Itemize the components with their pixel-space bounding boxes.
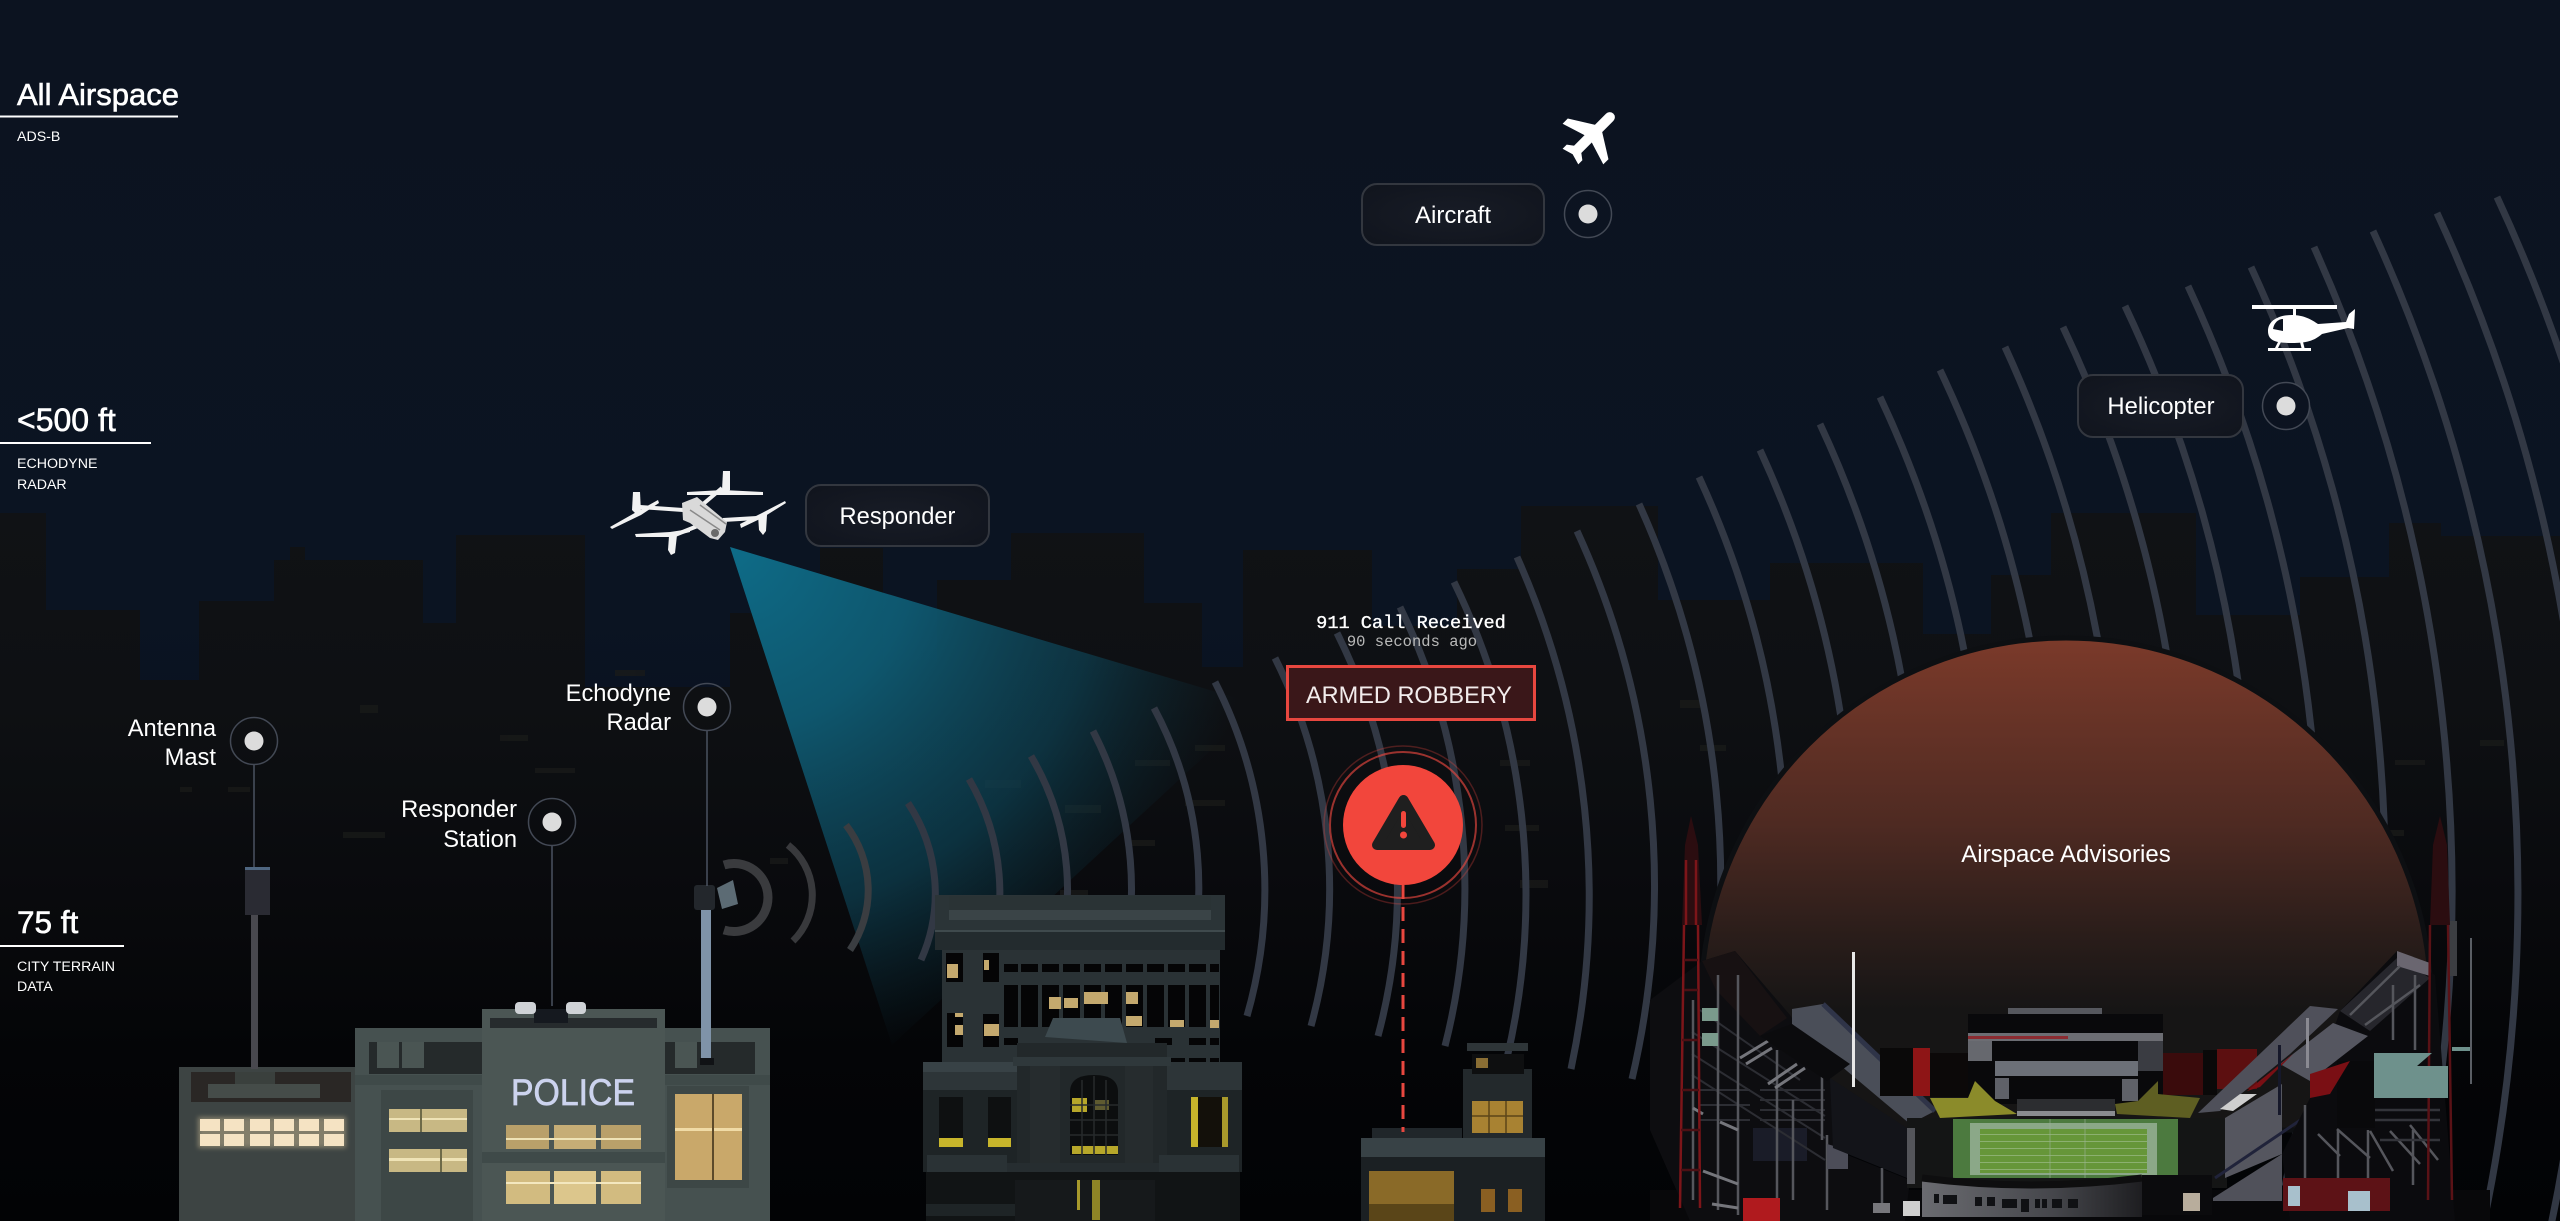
antenna mast (245, 867, 270, 1069)
stadium right upper bleachers (2198, 1006, 2338, 1113)
altitude label: all airspace (0, 77, 179, 145)
incident building tower (1463, 1069, 1532, 1138)
911 call status: 911 Call Received (1316, 613, 1506, 634)
responder station (515, 1002, 586, 1023)
marker: antenna mast: Mast (165, 745, 216, 771)
altitude label: 75 ft: DATA (17, 979, 53, 995)
courthouse arched window (1070, 1075, 1118, 1155)
stadium right red wall (2163, 1049, 2257, 1095)
police left wing window glow (198, 1117, 346, 1148)
police sign: POLICE (511, 1072, 635, 1113)
stadium right red accents (2310, 1061, 2350, 1098)
stadium dark arc rim (1922, 1178, 2142, 1185)
courthouse lit windows (947, 960, 1219, 1073)
police left windows (381, 1090, 473, 1221)
drone body (682, 497, 727, 540)
pill: helicopter: Helicopter (2107, 393, 2215, 420)
police center windows (482, 1125, 665, 1204)
stadium right scaffold (2282, 951, 2455, 1221)
stadium front windows (1934, 1194, 2078, 1212)
stadium yellow-green seating (1930, 1081, 2017, 1118)
stadium right light tower (2428, 816, 2457, 1200)
dome label: Airspace Advisories (1961, 841, 2171, 868)
stadium football field (1953, 1119, 2178, 1178)
altitude label: all airspace: All Airspace (17, 77, 179, 112)
stadium teal panel (2374, 1053, 2448, 1098)
helicopter icon (2252, 305, 2355, 351)
altitude label: 75 ft: 75 ft (17, 904, 79, 940)
courthouse ledges (927, 1155, 1007, 1172)
echodyne radar mast (694, 880, 738, 1065)
courthouse building (923, 895, 1242, 1221)
alert marker (1324, 746, 1482, 904)
altitude label: under 500 ft (0, 402, 151, 493)
pill: responder: Responder (840, 504, 956, 530)
pill: aircraft: Aircraft (1415, 202, 1491, 229)
stadium right lower bleachers (2280, 1023, 2368, 1081)
stadium right white highlight (2220, 1094, 2257, 1111)
courthouse ground floor (926, 1172, 1240, 1221)
incident building base (1361, 1138, 1545, 1221)
radar wave arcs (724, 197, 2560, 1221)
police right window (667, 1086, 749, 1188)
incident box: armed robbery (1288, 666, 1534, 720)
stadium flag pole right (2470, 938, 2472, 1084)
stadium left corner column (1907, 1128, 1915, 1184)
airspace advisory dome (1701, 638, 2431, 1130)
police main block (355, 1028, 770, 1221)
stadium left roof (1760, 1024, 1850, 1081)
courthouse side windows (939, 1097, 1228, 1147)
marker: antenna mast (128, 716, 278, 867)
altitude label: 75 ft: CITY TERRAIN (17, 959, 115, 975)
stadium field bowl (1907, 1118, 2227, 1188)
altitude label: 75 ft (0, 904, 124, 995)
incident box: armed robbery: ARMED ROBBERY (1306, 682, 1512, 709)
courthouse upper body (942, 950, 1220, 1075)
stadium ground shadow (1650, 1190, 2490, 1221)
altitude label: under 500 ft: RADAR (17, 477, 67, 493)
marker: responder station (401, 797, 576, 1006)
marker: echodyne radar: Echodyne (566, 681, 671, 707)
911 call status: 90 seconds ago (1347, 633, 1477, 651)
stadium flag pole left (1852, 952, 1855, 1087)
altitude label: under 500 ft: <500 ft (17, 402, 116, 438)
marker: responder station: Station (443, 827, 517, 853)
stadium (1650, 816, 2490, 1221)
city skyline silhouette (0, 506, 2560, 1221)
stadium left under-tier (1830, 1078, 1907, 1178)
police station (179, 1009, 770, 1221)
drone propellers (610, 490, 786, 537)
stadium left light tower (1680, 816, 1702, 1208)
stadium left scaffold (1650, 951, 1910, 1221)
pill: aircraft (1362, 184, 1544, 245)
stadium right grey wall (2213, 1084, 2330, 1201)
courthouse pediment (1045, 1018, 1127, 1043)
drone motors (632, 471, 767, 555)
airplane icon (1551, 94, 1633, 176)
responder drone icon (610, 471, 786, 555)
courthouse lower block (923, 1062, 1242, 1172)
drone camera cone (730, 547, 1260, 1045)
stadium left red wall (1880, 1048, 1968, 1097)
dashed incident line (1402, 885, 1404, 1132)
marker: responder station: Responder (401, 797, 517, 823)
courthouse upper windows (946, 953, 1219, 1073)
altitude label: under 500 ft: ECHODYNE (17, 456, 97, 472)
pill: helicopter (2078, 375, 2243, 437)
stadium front building (1922, 1178, 2142, 1217)
stadium right red base (2283, 1178, 2390, 1211)
icon: warning triangle (1377, 800, 1430, 845)
altitude label: all airspace: ADS-B (17, 129, 60, 145)
911 call status (1316, 613, 1506, 651)
stadium left bleachers (1792, 1004, 1935, 1124)
courthouse cornice (935, 895, 1225, 950)
marker: antenna mast: Antenna (128, 716, 217, 742)
marker: echodyne radar: Radar (606, 710, 671, 736)
courthouse center bay (1017, 1043, 1167, 1163)
marker: helicopter (2262, 382, 2310, 430)
courthouse door lights (1077, 1180, 1080, 1210)
stadium press box (1968, 1008, 2163, 1116)
drone arms (640, 488, 757, 537)
marker: aircraft (1564, 190, 1612, 238)
pill: responder (806, 485, 989, 546)
police left wing (179, 1067, 355, 1221)
police central tower (482, 1009, 665, 1221)
police left wing windows (200, 1119, 344, 1146)
marker: echodyne radar (566, 681, 730, 886)
small incident building (1361, 1043, 1545, 1221)
